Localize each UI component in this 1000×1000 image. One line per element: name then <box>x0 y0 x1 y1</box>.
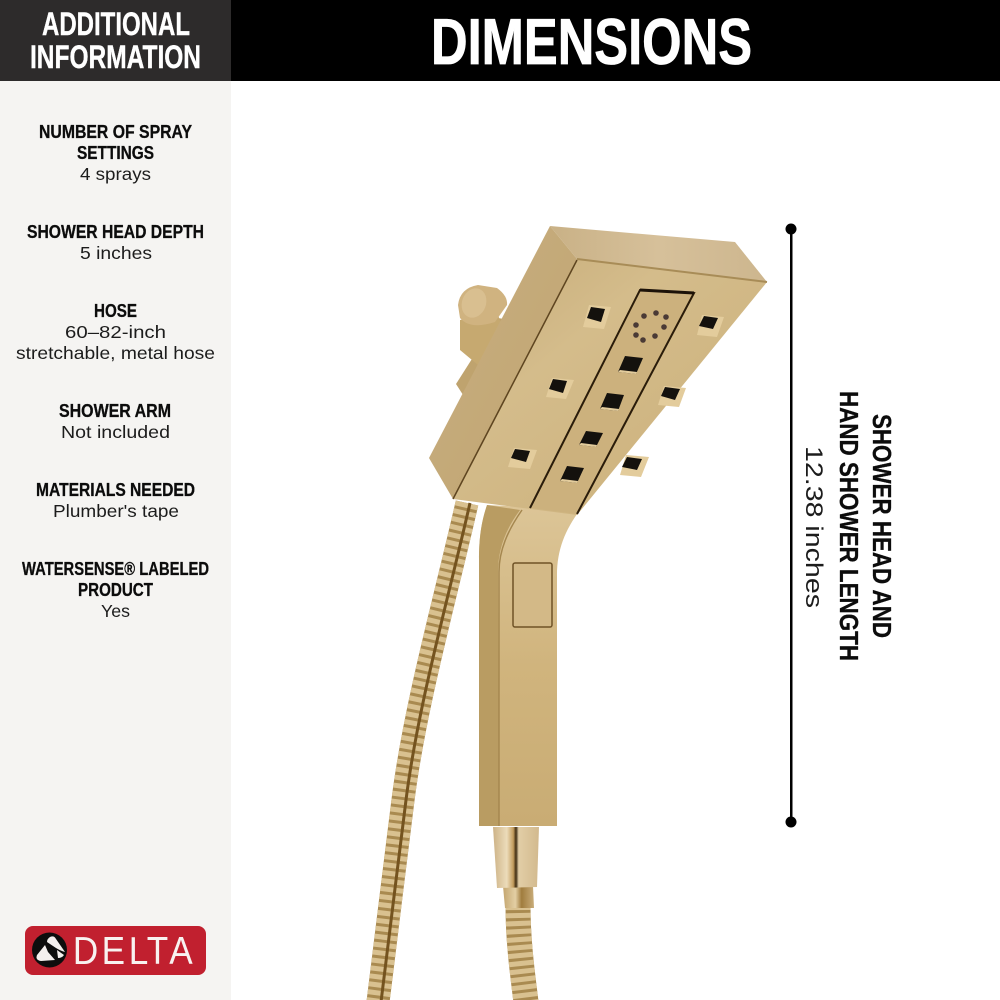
text block: shower head depth: SHOWER HEAD DEPTH <box>27 221 204 242</box>
text block: watersense: WATERSENSE® LABELED <box>22 558 209 579</box>
heading: additional information: INFORMATION <box>30 39 201 75</box>
head: top face <box>550 226 767 282</box>
dimension label: shower head and hand shower length: 12.38 inches <box>800 446 827 608</box>
text block: shower arm <box>59 400 171 442</box>
text block: spray settings: 4 sprays <box>80 164 151 184</box>
text block: materials needed: MATERIALS NEEDED <box>36 479 195 500</box>
dimension line <box>786 224 796 828</box>
panel: dimensions header bar <box>231 0 1000 81</box>
text block: spray settings: SETTINGS <box>77 142 154 163</box>
panel: additional information list <box>0 81 231 1000</box>
hose: bottom <box>518 905 526 1000</box>
heading: additional information: ADDITIONAL <box>42 6 190 42</box>
text block: watersense <box>22 558 209 621</box>
heading: dimensions: DIMENSIONS <box>431 5 752 78</box>
text block: materials needed <box>36 479 195 521</box>
dimension label: shower head and hand shower length: HAND SHOWER LENGTH <box>834 391 864 661</box>
panel: additional information header <box>0 0 231 81</box>
dimension label: shower head and hand shower length: SHOWER HEAD AND <box>867 414 897 638</box>
hose: left <box>378 503 470 1000</box>
mount: arm ball and bracket <box>456 285 510 410</box>
handle button <box>513 563 552 627</box>
text block: shower head depth <box>27 221 204 263</box>
head: front face <box>453 259 767 515</box>
text block: hose: HOSE <box>94 300 137 321</box>
text block: spray settings: NUMBER OF SPRAY <box>39 121 193 142</box>
text block: hose <box>16 300 215 363</box>
text block: hose: stretchable, metal hose <box>16 343 215 363</box>
head: side face <box>429 226 577 499</box>
text block: spray settings <box>39 121 193 184</box>
shower product illustration <box>378 226 767 1000</box>
text block: watersense: Yes <box>101 601 130 621</box>
hose collar <box>503 886 534 908</box>
handle <box>479 505 580 826</box>
text block: shower head depth: 5 inches <box>80 243 152 263</box>
text block: shower arm: Not included <box>61 422 170 442</box>
head: center spray panel <box>530 290 694 514</box>
logo: delta <box>25 926 206 975</box>
text block: hose: 60–82-inch <box>65 322 166 342</box>
spray nozzles <box>508 305 724 483</box>
text block: materials needed: Plumber's tape <box>53 501 179 521</box>
text block: watersense: PRODUCT <box>78 579 154 600</box>
heading: additional information <box>30 6 201 75</box>
cone connector <box>493 827 539 888</box>
dimension label: shower head and hand shower length <box>800 391 897 661</box>
spray ring <box>633 310 669 343</box>
logo: delta: DELTA <box>73 928 193 972</box>
text block: shower arm: SHOWER ARM <box>59 400 171 421</box>
